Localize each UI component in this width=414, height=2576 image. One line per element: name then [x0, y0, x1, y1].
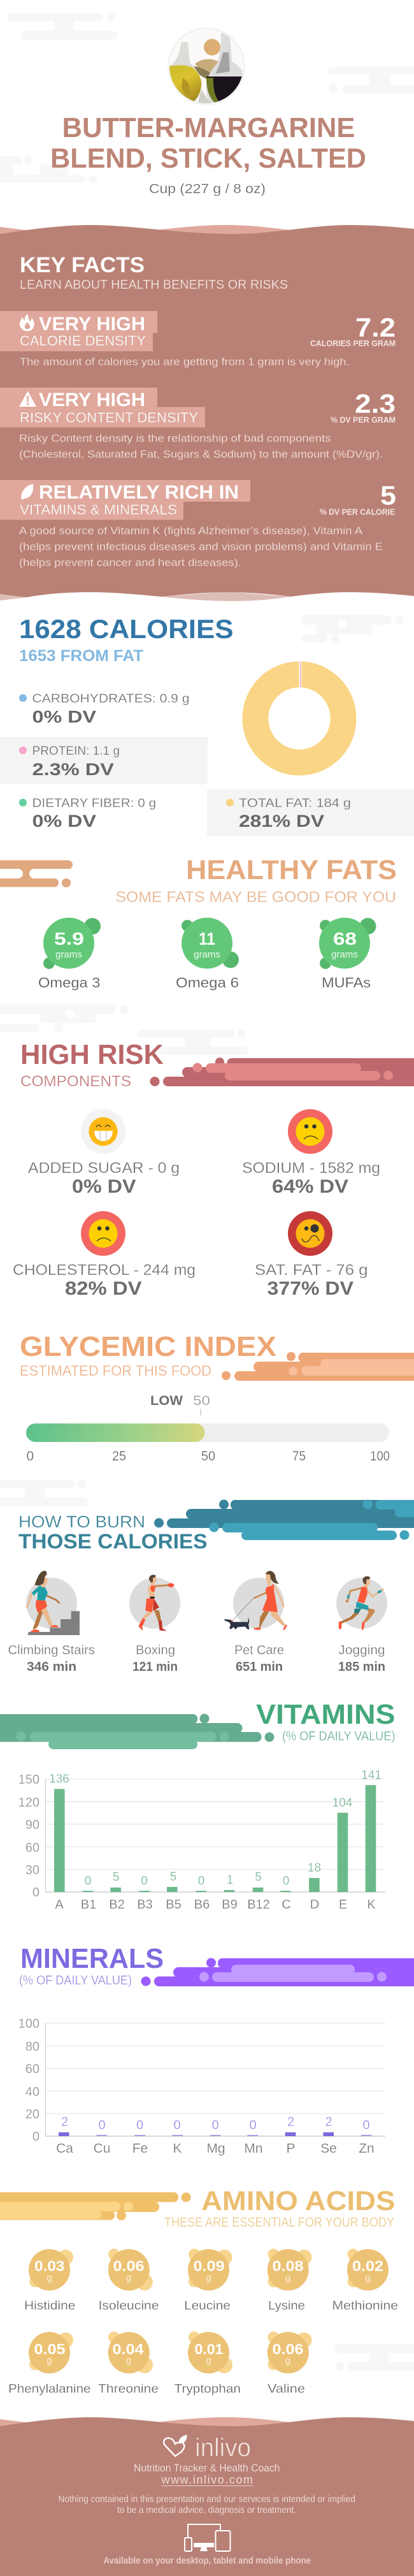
stat: omega 6: 11 [199, 929, 215, 949]
panel: amino acids [0, 2186, 398, 2396]
amino: valine: Valine [268, 2382, 305, 2396]
panel: footer [0, 2417, 414, 2576]
panel: healthy fats [0, 855, 397, 991]
fact: risky content density: % DV PER GRAM [331, 415, 396, 425]
minerals bar chart: 0 [211, 2118, 219, 2132]
high risk background clouds [0, 1005, 248, 1055]
amino cloud decoration [0, 2192, 191, 2220]
activity labels: 651 min [236, 1660, 283, 1674]
fact: calorie density: CALORIE DENSITY [20, 333, 146, 349]
amino: isoleucine: Isoleucine [98, 2299, 159, 2313]
stat: omega 6: grams [194, 949, 220, 960]
panel: vitamins: (% OF DAILY VALUE) [282, 1729, 395, 1743]
amino: methionine: g [365, 2273, 371, 2283]
vitamins bar chart: D [310, 1898, 319, 1912]
risk: sodium: 64% DV [272, 1176, 348, 1197]
fact: vitamins and minerals: (helps prevent cancer and heart diseases). [19, 557, 241, 569]
activity: pet care [224, 1571, 287, 1630]
activity labels: Pet Care [234, 1643, 284, 1657]
availability note: Available on your desktop, tablet and mobile phone [103, 2556, 311, 2566]
activity labels: Boxing [136, 1643, 175, 1657]
amino: threonine: g [126, 2355, 131, 2366]
glycemic scale labels: 0 [27, 1449, 34, 1464]
panel: glycemic index: ESTIMATED FOR THIS FOOD [20, 1362, 211, 1379]
risk: saturated fat: 377% DV [268, 1278, 353, 1299]
panel: calories [0, 614, 414, 836]
vitamins bar chart: 0 [283, 1875, 289, 1888]
fact: vitamins and minerals: VITAMINS & MINERALS [20, 502, 177, 518]
panel: how to burn those calories: THOSE CALORIES [18, 1530, 208, 1553]
activity labels: 346 min [27, 1660, 76, 1674]
minerals bar chart: 100 [18, 2017, 39, 2031]
glycemic marker: LOW [150, 1394, 183, 1408]
vitamins bar chart: 120 [18, 1796, 39, 1810]
legend: carbohydrates: 0% DV [32, 708, 96, 727]
activity labels: Climbing Stairs [8, 1643, 95, 1657]
vitamins cloud decoration [0, 1714, 274, 1749]
panel: minerals: MINERALS [20, 1943, 164, 1974]
vitamins bar chart: 136 [49, 1773, 69, 1786]
activity: boxing [129, 1575, 180, 1631]
amino: phenylalanine [8, 2332, 90, 2396]
amino: isoleucine: g [126, 2273, 131, 2283]
burn cloud decoration [154, 1499, 414, 1540]
key facts heading: LEARN ABOUT HEALTH BENEFITS OR RISKS [20, 278, 288, 292]
disclaimer: to be a medical advice, diagnosis or treatment. [117, 2505, 296, 2515]
footer tagline: Nutrition Tracker & Health Coach [134, 2462, 280, 2474]
fact: risky content density: 2.3 [355, 389, 396, 418]
minerals bar chart: P [286, 2141, 296, 2156]
stat: omega 3: grams [55, 949, 82, 960]
panel: amino acids: AMINO ACIDS [201, 2186, 395, 2216]
glycemic scale labels: 50 [201, 1449, 215, 1464]
activity labels: 185 min [338, 1660, 385, 1674]
amino: phenylalanine: Phenylalanine [8, 2382, 90, 2396]
stat: MUFAs [319, 918, 376, 991]
amino: valine [268, 2332, 312, 2396]
footer tagline: www.inlivo.com [161, 2473, 253, 2486]
amino: histidine: Histidine [24, 2299, 75, 2313]
amino: lysine: Lysine [268, 2299, 305, 2313]
vitamins bar chart: 90 [25, 1818, 39, 1832]
amino: methionine: 0.02 [352, 2258, 383, 2274]
amino: valine: 0.06 [273, 2341, 303, 2357]
panel: minerals [18, 1943, 414, 2156]
header background clouds [0, 13, 414, 184]
high risk cloud decoration [150, 1058, 414, 1086]
risk: added sugar: ADDED SUGAR - 0 g [28, 1160, 180, 1177]
minerals bar chart: 0 [98, 2118, 106, 2132]
glycemic gauge bar [26, 1423, 389, 1442]
fact: vitamins and minerals: A good source of Vitamin K (fights Alzheimer’s disease), Vitamin A [19, 525, 363, 537]
footer tagline [134, 2462, 280, 2486]
vitamins bar chart: 0 [85, 1875, 91, 1888]
vitamins bar chart: 0 [198, 1875, 204, 1888]
vitamins bar chart: B12 [247, 1898, 270, 1912]
risk: added sugar: 0% DV [72, 1176, 136, 1197]
amino: tryptophan: Tryptophan [175, 2382, 241, 2396]
minerals cloud decoration [141, 1958, 414, 1986]
vitamins bar chart: 5 [170, 1870, 176, 1884]
minerals bar chart: Zn [359, 2141, 375, 2156]
fact: calorie density: CALORIES PER GRAM [310, 338, 396, 348]
fact: calorie density: The amount of calories you are getting from 1 gram is very high. [20, 356, 349, 368]
risk: cholesterol: 82% DV [65, 1278, 141, 1299]
calories background cloud [301, 615, 404, 643]
icon: leaf [21, 484, 33, 500]
amino: threonine: 0.04 [112, 2341, 144, 2357]
vitamins bar chart: 150 [18, 1773, 39, 1787]
vitamins bar chart: 141 [361, 1769, 382, 1782]
vitamins bar chart: 5 [113, 1871, 119, 1884]
panel: high risk components: HIGH RISK [20, 1039, 164, 1070]
panel: how to burn those calories [8, 1499, 414, 1674]
fact: vitamins and minerals: 5 [380, 481, 396, 510]
vitamins bar chart: B1 [81, 1898, 96, 1912]
key facts heading [20, 253, 288, 292]
panel: glycemic index [20, 1331, 414, 1464]
vitamins bar chart: 104 [332, 1796, 353, 1810]
minerals bar chart: 60 [25, 2062, 39, 2076]
amino: lysine: g [285, 2273, 290, 2283]
icon: warning triangle [19, 391, 36, 407]
fact: calorie density: VERY HIGH [39, 314, 145, 335]
vitamins bar chart: B2 [109, 1898, 125, 1912]
risk: cholesterol [13, 1211, 196, 1299]
fact: calorie density: 7.2 [355, 312, 396, 342]
amino: phenylalanine: 0.05 [34, 2341, 66, 2357]
vitamins bar chart: 5 [255, 1871, 262, 1884]
activity labels: Jogging [339, 1643, 385, 1657]
logo: inlivo [164, 2434, 251, 2462]
icon: flame [20, 314, 34, 331]
minerals bar chart: K [173, 2141, 182, 2156]
minerals bar chart: Mn [244, 2141, 263, 2156]
stat: MUFAs: grams [331, 949, 358, 960]
panel: calories: 1653 FROM FAT [19, 647, 143, 665]
icon: devices [185, 2524, 231, 2551]
amino: leucine: g [206, 2273, 211, 2283]
vitamins bar chart: B3 [137, 1898, 153, 1912]
stat: MUFAs: MUFAs [322, 975, 371, 991]
amino: histidine: g [46, 2273, 52, 2283]
activity: climbing stairs [26, 1571, 80, 1635]
stat: omega 3 [38, 918, 101, 991]
vitamins bar chart: B6 [194, 1898, 210, 1912]
minerals bar chart: Mg [206, 2141, 225, 2156]
activity labels [8, 1643, 385, 1674]
stat: omega 6 [176, 918, 239, 991]
vitamins bar chart: A [55, 1898, 64, 1912]
amino: leucine [184, 2249, 232, 2313]
vitamins bar chart: 18 [308, 1861, 321, 1875]
fact: risky content density: VERY HIGH [39, 389, 145, 411]
activity labels: 121 min [132, 1660, 178, 1674]
minerals bar chart: 0 [173, 2118, 181, 2132]
risk: added sugar [28, 1109, 180, 1197]
glycemic scale labels: 75 [292, 1449, 306, 1464]
stat: MUFAs: 68 [333, 929, 357, 949]
vitamins bar chart: 0 [32, 1886, 39, 1900]
disclaimer [59, 2494, 355, 2515]
burn calories background cloud [0, 1480, 88, 1506]
risk: saturated fat [255, 1211, 368, 1299]
panel: high risk components [13, 1039, 414, 1299]
minerals bar chart: 20 [25, 2107, 39, 2121]
legend: dietary fiber: 0% DV [32, 811, 96, 831]
vitamins bar chart: 30 [25, 1863, 39, 1877]
minerals bar chart: Se [320, 2141, 337, 2156]
amino: threonine: Threonine [98, 2382, 159, 2396]
minerals bar chart: 80 [25, 2040, 39, 2054]
amino: valine: g [285, 2355, 290, 2366]
panel: key facts [0, 225, 414, 601]
disclaimer: Nothing contained in this presentation and our services is intended or implied [59, 2494, 355, 2505]
panel: vitamins [0, 1699, 395, 1912]
amino: tryptophan: 0.01 [195, 2341, 224, 2357]
amino: lysine: 0.08 [273, 2258, 304, 2274]
panel: how to burn those calories: HOW TO BURN [18, 1512, 145, 1531]
minerals bar chart: 2 [61, 2115, 68, 2129]
fact: calorie density [0, 311, 396, 368]
panel: minerals: (% OF DAILY VALUE) [19, 1974, 132, 1988]
amino background cloud [334, 2344, 414, 2371]
amino: leucine: Leucine [184, 2299, 231, 2313]
fact: risky content density: Risky Content density is the relationship of bad components [19, 432, 331, 444]
fact: risky content density: RISKY CONTENT DENSITY [20, 409, 198, 426]
amino: threonine [98, 2332, 159, 2396]
panel: high risk components: COMPONENTS [20, 1073, 131, 1090]
risk: saturated fat: SAT. FAT - 76 g [255, 1262, 368, 1279]
legend: total fat: 281% DV [239, 811, 324, 831]
legend: protein [0, 737, 208, 784]
legend: total fat [207, 789, 414, 836]
title: BUTTER-MARGARINE [62, 112, 355, 143]
minerals bar chart: 40 [25, 2085, 39, 2099]
amino: histidine: 0.03 [34, 2258, 65, 2274]
minerals bar chart: 0 [136, 2118, 143, 2132]
vitamins bar chart: B5 [166, 1898, 182, 1912]
risk: cholesterol: CHOLESTEROL - 244 mg [13, 1262, 196, 1279]
panel: glycemic index: GLYCEMIC INDEX [20, 1331, 276, 1362]
amino: leucine: 0.09 [194, 2258, 224, 2274]
vitamins bar chart [18, 1769, 385, 1912]
vitamins bar chart: C [282, 1898, 291, 1912]
legend: dietary fiber [19, 797, 156, 831]
logo: inlivo: inlivo [195, 2434, 251, 2462]
minerals bar chart: Cu [94, 2141, 110, 2156]
fact: risky content density: (Cholesterol, Saturated Fat, Sugars & Sodium) to the amount (%DV/gr). [19, 448, 383, 460]
minerals bar chart: 2 [325, 2115, 332, 2129]
amino: tryptophan [175, 2332, 241, 2396]
key facts heading: KEY FACTS [20, 253, 145, 277]
legend: dietary fiber: DIETARY FIBER: 0 g [32, 797, 156, 810]
serving size: Cup (227 g / 8 oz) [149, 182, 266, 196]
minerals bar chart: Fe [132, 2141, 148, 2156]
amino: histidine [24, 2249, 75, 2313]
vitamins bar chart: 60 [25, 1841, 39, 1855]
panel: calories: 1628 CALORIES [19, 614, 233, 644]
fact: vitamins and minerals: RELATIVELY RICH IN [39, 482, 239, 503]
amino: lysine [268, 2249, 312, 2313]
title [50, 112, 366, 174]
vitamins bar chart: 1 [227, 1874, 233, 1887]
stat: omega 6: Omega 6 [176, 975, 239, 991]
panel: vitamins: VITAMINS [256, 1699, 395, 1730]
vitamins bar chart: 0 [141, 1875, 148, 1888]
legend: protein: PROTEIN: 1.1 g [32, 745, 120, 758]
vitamins bar chart: K [367, 1898, 376, 1912]
amino: isoleucine: 0.06 [113, 2258, 144, 2274]
minerals bar chart [18, 2017, 385, 2156]
amino: tryptophan: g [206, 2355, 211, 2366]
vitamins bar chart: B9 [222, 1898, 238, 1912]
food photo: oil bottles [168, 27, 245, 105]
legend: carbohydrates [19, 692, 190, 727]
glycemic cloud decoration [222, 1352, 414, 1381]
amino: methionine: Methionine [332, 2299, 398, 2313]
amino: phenylalanine: g [46, 2355, 52, 2366]
stat: omega 3: Omega 3 [38, 975, 101, 991]
healthy fats cloud decoration [0, 861, 74, 887]
stat: omega 3: 5.9 [54, 929, 84, 949]
amino: methionine [332, 2249, 398, 2313]
fact: risky content density [0, 388, 396, 460]
title: BLEND, STICK, SALTED [50, 143, 366, 174]
legend: carbohydrates: CARBOHYDRATES: 0.9 g [32, 692, 190, 706]
fact: vitamins and minerals [0, 480, 396, 569]
fact: vitamins and minerals: (helps prevent infectious diseases and vision problems) and Vitamin E [19, 541, 383, 553]
glycemic scale labels: 100 [370, 1449, 390, 1464]
glycemic scale labels: 25 [112, 1449, 126, 1464]
panel: healthy fats: HEALTHY FATS [186, 855, 397, 885]
donut chart [255, 662, 343, 762]
minerals bar chart: 0 [362, 2118, 370, 2132]
panel: healthy fats: SOME FATS MAY BE GOOD FOR YOU [116, 889, 396, 906]
fact: vitamins and minerals: % DV PER CALORIE [320, 507, 395, 516]
glycemic marker [150, 1394, 210, 1416]
minerals bar chart: 2 [287, 2115, 294, 2129]
legend: total fat: TOTAL FAT: 184 g [239, 797, 351, 810]
glycemic marker: 50 [193, 1394, 210, 1408]
legend: protein: 2.3% DV [32, 760, 114, 779]
activity: jogging [336, 1576, 387, 1631]
minerals bar chart: Ca [56, 2141, 73, 2156]
vitamins bar chart: E [339, 1898, 347, 1912]
amino: isoleucine [98, 2249, 159, 2313]
minerals bar chart: 0 [32, 2130, 39, 2144]
risk: sodium [242, 1109, 380, 1197]
glycemic scale labels [27, 1449, 390, 1464]
minerals bar chart: 0 [249, 2118, 257, 2132]
risk: sodium: SODIUM - 1582 mg [242, 1160, 380, 1177]
